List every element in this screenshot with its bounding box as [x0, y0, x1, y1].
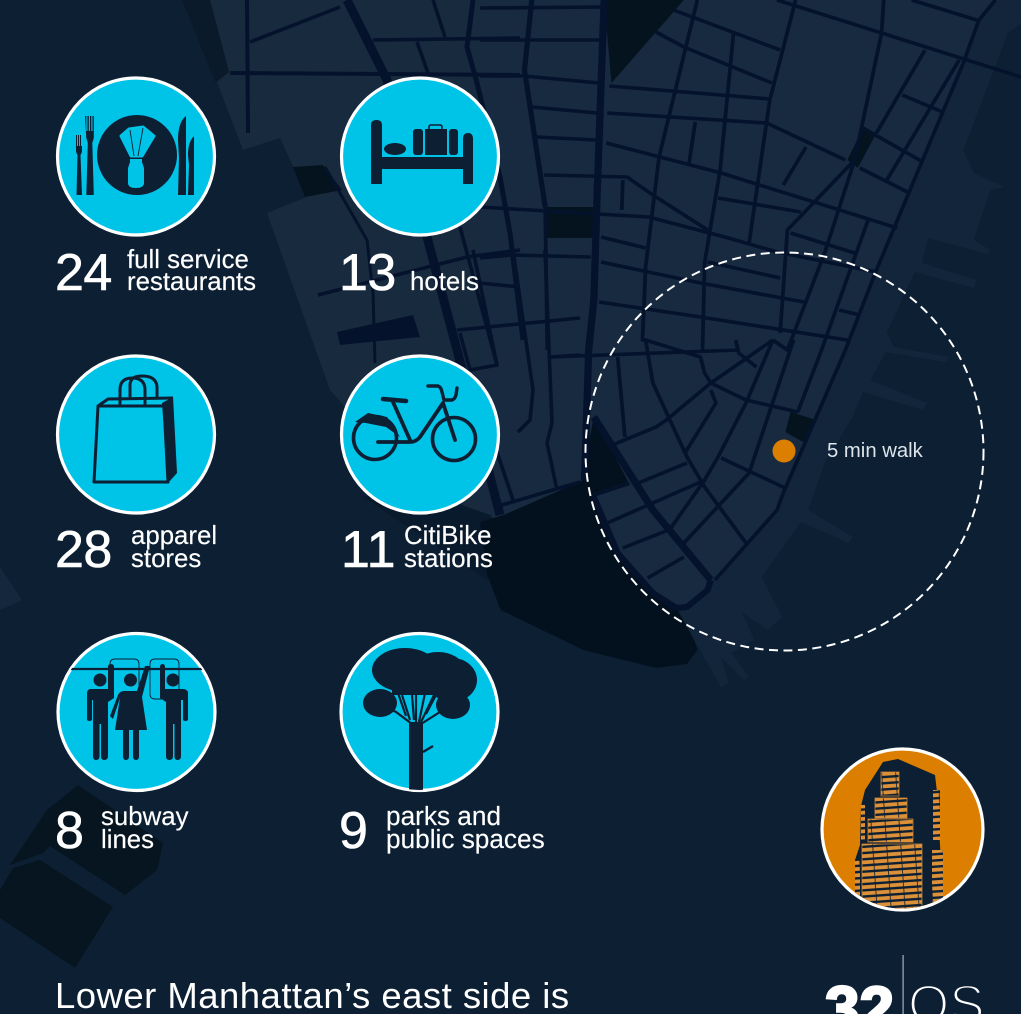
map: dark southern wedge — [581, 417, 630, 497]
icon: tree — [341, 634, 498, 790]
label: subway lines: subway — [101, 803, 189, 831]
logo: 32 OS — [825, 955, 985, 1014]
label: 5 min walk: 5 min walk — [827, 440, 924, 462]
map: dark top wedge — [604, 0, 684, 83]
label: subway lines: lines — [101, 826, 154, 854]
icon: subway riders — [58, 634, 215, 790]
map: dark East River water — [480, 480, 697, 668]
stat: hotels — [339, 78, 498, 302]
value: 28: 28 — [55, 521, 112, 579]
value: 11: 11 — [341, 521, 396, 579]
label: apparel stores: stores — [131, 545, 201, 573]
map: east shore strip and piers — [646, 0, 1021, 687]
stat: subway lines — [55, 634, 215, 860]
icon: bicycle — [342, 356, 498, 513]
label: parks and public spaces: parks and — [386, 801, 501, 831]
value: 9: 9 — [339, 802, 367, 860]
label: parks and public spaces: public spaces — [386, 824, 545, 854]
map: dark shape lower-left upper — [10, 785, 163, 895]
map: dark west block — [337, 315, 420, 345]
map: west shore dark strip — [182, 0, 229, 82]
value: 24: 24 — [55, 244, 112, 302]
map: west land mass — [210, 0, 540, 520]
map: dark shape lower-left lower — [0, 860, 113, 968]
stat: parks and public spaces — [339, 634, 545, 860]
map: darker water wedge — [363, 490, 521, 580]
label: full service restaurants: full service — [127, 246, 249, 274]
label: full service restaurants: restaurants — [127, 268, 256, 296]
stat: restaurants — [55, 78, 256, 302]
location marker dot — [772, 440, 796, 462]
map: dark block east — [847, 128, 876, 168]
icon: bed and suitcase — [342, 78, 498, 235]
map: west streets — [230, 0, 580, 515]
map: dark pier block — [293, 165, 342, 197]
label: hotels: hotels — [410, 268, 479, 296]
icon: shopping bag — [58, 356, 214, 513]
map: far-left land fragment — [0, 567, 22, 610]
map: east side of the island — [363, 0, 1021, 687]
icon: skyscraper in orange circle — [822, 749, 983, 915]
map: east streets — [480, 0, 1021, 608]
icon: place setting — [58, 78, 214, 235]
map: dark block mid — [545, 207, 594, 238]
value: 8: 8 — [55, 802, 83, 860]
value: 13: 13 — [339, 244, 396, 302]
walking radius dashed circle — [586, 252, 984, 650]
map: east land mass — [480, 0, 995, 607]
stat: CitiBike stations — [341, 356, 498, 579]
label: apparel stores: apparel — [131, 522, 217, 550]
stat: apparel stores — [55, 356, 217, 579]
label: CitiBike stations: CitiBike — [404, 522, 491, 550]
map: dark block south — [785, 412, 816, 442]
label: CitiBike stations: stations — [404, 545, 493, 573]
